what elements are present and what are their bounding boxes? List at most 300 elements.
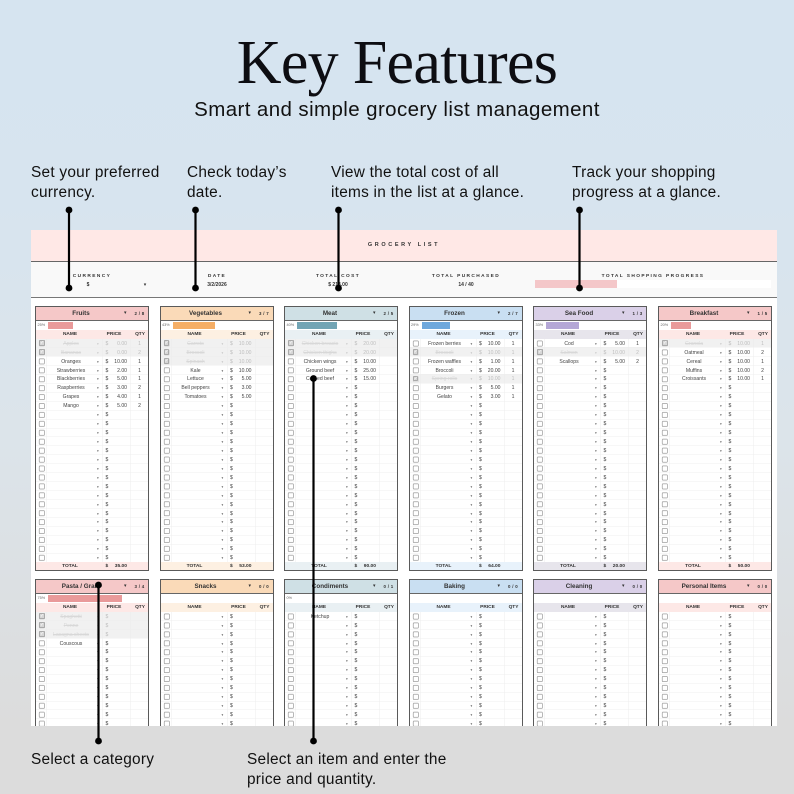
total: $ [354, 564, 357, 569]
summary: shopping progress: TOTAL SHOPPING PROGRESS [602, 274, 704, 278]
item rows: 10.00 [737, 341, 750, 347]
header [534, 307, 646, 320]
item rows: Oranges [61, 359, 81, 365]
header: 0 / 0 [632, 584, 643, 589]
header: ▾ [622, 310, 625, 316]
panel: Fruits [35, 306, 149, 571]
total [410, 562, 522, 571]
summary: currency: $ [87, 282, 89, 288]
column headers: PRICE [231, 604, 246, 610]
total: 20.00 [613, 564, 625, 569]
item rows: 2 [138, 350, 141, 356]
item rows [160, 338, 272, 562]
arrow: currency [66, 207, 72, 291]
header: Pasta / Grain [62, 583, 100, 590]
item rows: 3.00 [117, 385, 127, 391]
item rows: Apples [63, 341, 79, 347]
item rows: Lasagna sheets [53, 632, 89, 638]
header: ▾ [747, 583, 750, 589]
item rows: 20.00 [363, 341, 376, 347]
header: 1 / 3 [632, 311, 643, 316]
arrow: item [310, 375, 317, 744]
item rows [410, 612, 522, 726]
item rows: Cereal [686, 359, 702, 365]
item rows: Kale [190, 368, 201, 374]
item rows: 1 [512, 394, 514, 400]
header: ▾ [622, 583, 625, 589]
item rows: 2 [761, 350, 764, 356]
header [285, 307, 397, 320]
item rows: 10.00 [239, 368, 252, 374]
summary: total purchased [432, 274, 500, 288]
item rows: ✓ [538, 349, 542, 355]
header: 2 / 5 [383, 311, 394, 316]
column headers: PRICE [107, 332, 121, 336]
column headers: PRICE [605, 332, 619, 336]
column headers [659, 602, 771, 612]
header: ▾ [124, 583, 127, 589]
item rows: ✓ [164, 340, 169, 346]
arrow: total cost [335, 207, 342, 291]
header: Frozen [444, 310, 465, 317]
item rows: 20.00 [488, 368, 500, 374]
header: ▾ [248, 583, 251, 589]
item rows: Salmon [560, 350, 578, 356]
panel: Sea Food [533, 306, 647, 571]
item rows: 1 [512, 359, 514, 365]
column headers [160, 602, 272, 612]
item rows [285, 612, 397, 726]
column headers: QTY [633, 332, 643, 336]
column headers: QTY [260, 332, 269, 336]
item rows: Broccoli [186, 350, 205, 356]
item rows [410, 338, 522, 562]
panel: Personal Items [658, 579, 772, 726]
item rows: ▾ ▾ ▾ ▾ ▾ ▾ ▾ ▾ ▾ ▾ ▾ ▾ ▾ [222, 615, 223, 726]
item rows: 3.00 [242, 385, 252, 391]
item rows: 10.00 [612, 350, 625, 356]
panel: Baking [408, 579, 522, 726]
column headers: QTY [384, 332, 394, 336]
item rows: Chicken thighs [303, 350, 337, 356]
panel: Snacks [160, 579, 274, 726]
header: 3 / 4 [134, 584, 145, 589]
item rows: ▾ ▾ ▾ ▾ ▾ ▾ ▾ ▾ ▾ ▾ ▾ ▾ ▾ ▾ ▾ ▾ ▾ ▾ ▾ ▾ ▾ ▾ ▾ ▾ ▾ [346, 342, 348, 560]
summary: total purchased: TOTAL PURCHASED [432, 274, 500, 278]
total: TOTAL [187, 564, 202, 569]
item rows: Grapes [63, 394, 79, 400]
column headers [285, 602, 397, 612]
summary: currency: ▾ [144, 282, 146, 288]
header [410, 307, 522, 320]
header: ▾ [498, 310, 500, 316]
item rows: ▾ ▾ ▾ ▾ ▾ ▾ ▾ ▾ ▾ ▾ ▾ ▾ ▾ ▾ ▾ ▾ ▾ ▾ ▾ ▾ ▾ ▾ ▾ ▾ ▾ [595, 342, 597, 560]
item rows: 5.00 [117, 376, 127, 382]
item rows: 1 [761, 376, 764, 382]
column headers: NAME [312, 332, 326, 336]
progress bar: 75% [38, 596, 45, 600]
column headers: QTY [260, 604, 269, 610]
header [36, 580, 148, 594]
item rows: 10.00 [114, 359, 127, 365]
header [285, 580, 397, 594]
bottom callout: category: Select a category [31, 751, 154, 768]
item rows: $ $ $ $ $ $ $ $ $ $ $ $ $ [604, 614, 606, 726]
item rows: 1 [138, 376, 141, 382]
item rows: 2 [636, 359, 639, 365]
title: Key Features [237, 29, 557, 97]
item rows: 10.00 [239, 359, 252, 365]
panel: Vegetables [160, 306, 274, 571]
progress bar [534, 320, 646, 330]
column headers: QTY [509, 604, 518, 610]
item rows: Gelato [437, 394, 452, 400]
item rows: ▾ ▾ ▾ ▾ ▾ ▾ ▾ ▾ ▾ ▾ ▾ ▾ ▾ ▾ ▾ ▾ ▾ ▾ ▾ ▾ ▾ ▾ ▾ ▾ ▾ [470, 342, 472, 560]
item rows: 10.00 [488, 376, 500, 382]
header [160, 307, 272, 320]
item rows: ▾ ▾ ▾ ▾ ▾ ▾ ▾ ▾ ▾ ▾ ▾ ▾ ▾ ▾ ▾ ▾ ▾ ▾ ▾ ▾ ▾ ▾ ▾ ▾ ▾ [222, 342, 223, 560]
total: 50.00 [738, 564, 750, 569]
item rows: Croissants [682, 376, 706, 382]
item rows: 5.00 [242, 376, 252, 382]
summary: currency [73, 274, 146, 288]
item rows: $ $ $ $ $ $ $ $ $ $ $ $ $ [728, 614, 731, 726]
item rows: ▾ ▾ ▾ ▾ ▾ ▾ ▾ ▾ ▾ ▾ ▾ ▾ ▾ [720, 615, 722, 726]
progress bar [410, 320, 522, 330]
item rows: Bananas [61, 350, 81, 356]
column headers: QTY [758, 332, 768, 336]
item rows: 10.00 [488, 341, 500, 347]
column headers [534, 330, 646, 338]
header [160, 580, 272, 594]
item rows: Lettuce [187, 376, 204, 382]
item rows: ✓ [40, 622, 44, 628]
header [659, 307, 771, 320]
callout: total cost: items in the list at a glance. [331, 184, 524, 200]
column headers: QTY [509, 332, 518, 336]
item rows: 5.00 [491, 385, 500, 391]
header: Baking [444, 583, 465, 590]
item rows: 20.00 [363, 350, 376, 356]
column headers: NAME [686, 332, 700, 336]
callout: progress [572, 164, 721, 200]
item rows: 10.00 [488, 350, 500, 356]
item rows: 0.00 [117, 341, 127, 347]
progress bar: 40% [286, 322, 294, 326]
column headers: NAME [63, 332, 77, 336]
item rows: Spaghetti [60, 614, 82, 620]
item rows: 1 [761, 359, 764, 365]
total [285, 562, 397, 571]
callout: total cost: View the total cost of all [331, 164, 499, 180]
item rows: 1 [138, 341, 141, 347]
column headers [285, 330, 397, 338]
column headers [36, 330, 148, 338]
column headers [410, 330, 522, 338]
item rows: 2 [636, 350, 639, 356]
item rows: 2 [138, 385, 141, 391]
bottom callout: item [247, 751, 447, 788]
total: 35.00 [115, 564, 127, 569]
column headers: PRICE [730, 332, 744, 336]
progress bar: 29% [411, 322, 419, 326]
item rows: Frozen waffles [428, 359, 461, 365]
item rows: Broccoli [435, 368, 454, 374]
summary: currency: CURRENCY [73, 274, 111, 278]
callout: total cost [331, 164, 524, 200]
progress bar [160, 320, 272, 330]
item rows: 0.00 [117, 350, 127, 356]
progress bar [285, 320, 397, 330]
item rows: ▾ ▾ ▾ ▾ ▾ ▾ ▾ ▾ ▾ ▾ ▾ ▾ ▾ ▾ ▾ ▾ ▾ ▾ ▾ ▾ ▾ ▾ ▾ ▾ ▾ [720, 342, 722, 560]
progress bar: 20% [660, 322, 668, 326]
item rows: ✓ [289, 349, 293, 355]
header: 2 / 7 [508, 311, 518, 316]
item rows: Raspberries [57, 385, 85, 391]
summary: total cost: TOTAL COST [316, 274, 360, 278]
summary: date [207, 274, 227, 288]
item rows: Carrots [187, 341, 204, 347]
progress bar [285, 594, 397, 602]
item rows: Strawberries [57, 368, 85, 374]
header: 3 / 7 [259, 311, 269, 316]
item rows: Bell peppers [181, 385, 210, 391]
header: ▾ [373, 583, 376, 589]
header: ▾ [248, 310, 251, 316]
column headers: PRICE [480, 604, 495, 610]
progress bar [36, 320, 148, 330]
item rows: $ $ $ $ $ $ $ $ $ $ $ $ $ $ $ $ $ $ $ $ $ $ $ $ $ [728, 341, 731, 561]
item rows: ▾ ▾ ▾ ▾ ▾ ▾ ▾ ▾ ▾ ▾ ▾ ▾ ▾ ▾ ▾ ▾ ▾ ▾ ▾ ▾ ▾ ▾ ▾ ▾ ▾ [97, 342, 99, 560]
item rows: 5.00 [615, 341, 625, 347]
total [659, 562, 771, 571]
total: TOTAL [311, 564, 327, 569]
item rows: 1 [138, 368, 141, 374]
item rows: 1 [138, 394, 141, 400]
item rows: $ $ $ $ $ $ $ $ $ $ $ $ $ [230, 614, 233, 726]
total: TOTAL [62, 564, 78, 569]
item rows: Burgers [436, 385, 453, 391]
item rows [534, 338, 646, 562]
summary: total cost [316, 274, 360, 288]
total: $ [604, 564, 606, 569]
total: 90.00 [364, 564, 376, 569]
callout: currency: currency. [31, 184, 95, 200]
header: Condiments [312, 583, 348, 590]
column headers: NAME [187, 332, 202, 336]
header: Snacks [194, 583, 217, 590]
panel: Breakfast [658, 306, 772, 571]
item rows [659, 612, 771, 726]
item rows: ✓ [663, 340, 667, 346]
item rows: Granola [685, 341, 703, 347]
summary: total purchased: 14 / 40 [458, 282, 474, 288]
header: 0 / 0 [757, 584, 768, 589]
total [534, 562, 646, 571]
item rows: 10.00 [737, 359, 750, 365]
item rows: $ $ $ $ $ $ $ $ $ $ $ $ $ $ $ $ $ $ $ $ $ $ $ $ $ [230, 341, 233, 561]
item rows: 10.00 [239, 341, 252, 347]
item rows: 1 [512, 376, 514, 382]
header: Vegetables [189, 310, 222, 317]
panel: Meat [284, 306, 398, 571]
header: Fruits [72, 310, 90, 317]
item rows: Mango [63, 403, 79, 409]
header: ▾ [747, 310, 750, 316]
item rows: $ $ $ $ $ $ $ $ $ $ $ $ $ $ $ $ $ $ $ $ $ $ $ $ $ [479, 341, 482, 561]
item rows: Tomatoes [184, 394, 207, 400]
total: $ [230, 564, 233, 569]
item rows: 1 [512, 341, 514, 347]
column headers: QTY [135, 604, 145, 610]
callout: progress: progress at a glance. [572, 184, 721, 200]
column headers: NAME [686, 604, 700, 610]
column headers: PRICE [356, 332, 370, 336]
column headers: PRICE [356, 604, 370, 610]
header: 0 / 0 [259, 584, 269, 589]
item rows: Spinach [186, 359, 205, 365]
item rows: Cod [564, 341, 574, 347]
bottom callout: item: Select an item and enter the [247, 751, 447, 768]
item rows: 10.00 [737, 368, 750, 374]
column headers: NAME [436, 604, 451, 610]
column headers: PRICE [480, 332, 495, 336]
header: Breakfast [690, 310, 718, 317]
item rows: 2 [761, 368, 764, 374]
item rows: $ $ $ $ $ $ $ $ $ $ $ $ $ [106, 614, 108, 726]
column headers: QTY [758, 604, 768, 610]
item rows: ✓ [289, 340, 293, 346]
item rows: ▾ ▾ ▾ ▾ ▾ ▾ ▾ ▾ ▾ ▾ ▾ ▾ ▾ [346, 615, 348, 726]
item rows: ✓ [414, 349, 418, 355]
item rows: Ground beef [306, 368, 334, 374]
item rows: 4.00 [117, 394, 127, 400]
total: $ [728, 564, 731, 569]
item rows: Scallops [559, 359, 579, 365]
item rows: 1 [761, 341, 764, 347]
progress bar: 25% [38, 322, 45, 326]
total: TOTAL [436, 564, 451, 569]
total: $ [106, 564, 108, 569]
item rows [36, 338, 148, 562]
item rows: ✓ [164, 358, 169, 364]
item rows: ✓ [40, 349, 44, 355]
total: TOTAL [560, 564, 576, 569]
item rows: $ $ $ $ $ $ $ $ $ $ $ $ $ $ $ $ $ $ $ $ $ $ $ $ $ [106, 341, 108, 561]
item rows: 1.00 [491, 359, 500, 365]
item rows: ▾ ▾ ▾ ▾ ▾ ▾ ▾ ▾ ▾ ▾ ▾ ▾ ▾ [470, 615, 472, 726]
callout: date [187, 164, 287, 200]
column headers: NAME [561, 604, 575, 610]
item rows: 1 [512, 350, 514, 356]
total: $ [479, 564, 482, 569]
total [36, 562, 148, 571]
item rows [160, 612, 272, 726]
item rows: 10.00 [737, 350, 750, 356]
item rows: 5.00 [117, 403, 127, 409]
item rows: 2 [138, 403, 141, 409]
column headers [534, 602, 646, 612]
item rows [36, 612, 148, 726]
column headers [659, 330, 771, 338]
item rows: Penne [64, 623, 78, 629]
progress bar [659, 320, 771, 330]
header: 0 / 1 [383, 584, 394, 589]
sheet title band: GROCERY LIST [368, 242, 440, 248]
header: 1 / 5 [757, 311, 768, 316]
header: ▾ [498, 583, 500, 589]
header [659, 580, 771, 594]
item rows: $ $ $ $ $ $ $ $ $ $ $ $ $ [479, 614, 482, 726]
total: 53.00 [239, 564, 252, 569]
arrow: date [192, 207, 199, 291]
progress bar: 33% [536, 322, 543, 326]
header: Cleaning [566, 583, 592, 590]
item rows: Oatmeal [684, 350, 704, 356]
subtitle: Smart and simple grocery list management [194, 98, 600, 121]
column headers: NAME [561, 332, 575, 336]
panel: Cleaning [533, 579, 647, 726]
item rows: ✓ [414, 376, 418, 382]
item rows: 1 [138, 359, 141, 365]
summary: date: 3/2/2026 [207, 282, 227, 288]
item rows: 10.00 [363, 359, 376, 365]
total: 64.00 [488, 564, 500, 569]
column headers: PRICE [107, 604, 121, 610]
arrow: category [95, 582, 102, 744]
item rows: 1 [512, 368, 514, 374]
item rows: $ $ $ $ $ $ $ $ $ $ $ $ $ $ $ $ $ $ $ $ $ $ $ $ $ [354, 341, 357, 561]
arrow: progress [576, 207, 583, 291]
header [410, 580, 522, 594]
item rows: 1 [636, 341, 639, 347]
column headers: NAME [436, 332, 451, 336]
item rows [659, 338, 771, 562]
item rows: Blackberries [57, 376, 85, 382]
total [160, 562, 272, 571]
callout: progress: Track your shopping [572, 164, 716, 180]
header: ▾ [373, 310, 376, 316]
column headers [36, 602, 148, 612]
item rows: Frozen berries [428, 341, 461, 347]
header: 2 / 8 [134, 311, 145, 316]
summary: shopping progress [535, 274, 704, 288]
column headers: NAME [312, 604, 326, 610]
item rows: ▾ ▾ ▾ ▾ ▾ ▾ ▾ ▾ ▾ ▾ ▾ ▾ ▾ [595, 615, 597, 726]
item rows: 15.00 [363, 376, 376, 382]
item rows: 10.00 [239, 350, 252, 356]
item rows: $ $ $ $ $ $ $ $ $ $ $ $ $ [354, 614, 357, 726]
item rows: ▾ ▾ ▾ ▾ ▾ ▾ ▾ ▾ ▾ ▾ ▾ ▾ ▾ [97, 615, 99, 726]
callout: date: Check today’s [187, 164, 287, 180]
item rows: 3.00 [491, 394, 500, 400]
panel: Pasta / Grain [35, 579, 149, 726]
summary row [31, 262, 777, 298]
column headers: PRICE [605, 604, 619, 610]
header: ▾ [124, 310, 127, 316]
spreadsheet [31, 230, 777, 726]
item rows: Chicken breasts [302, 341, 338, 347]
panel: Frozen [408, 306, 522, 571]
progress bar: 43% [162, 322, 170, 326]
item rows: Chicken wings [304, 359, 336, 365]
item rows: ✓ [40, 631, 44, 637]
progress bar: 0% [286, 596, 292, 600]
item rows: 5.00 [242, 394, 252, 400]
item rows: Broccoli [435, 350, 454, 356]
item rows [534, 612, 646, 726]
item rows: ✓ [164, 349, 169, 355]
